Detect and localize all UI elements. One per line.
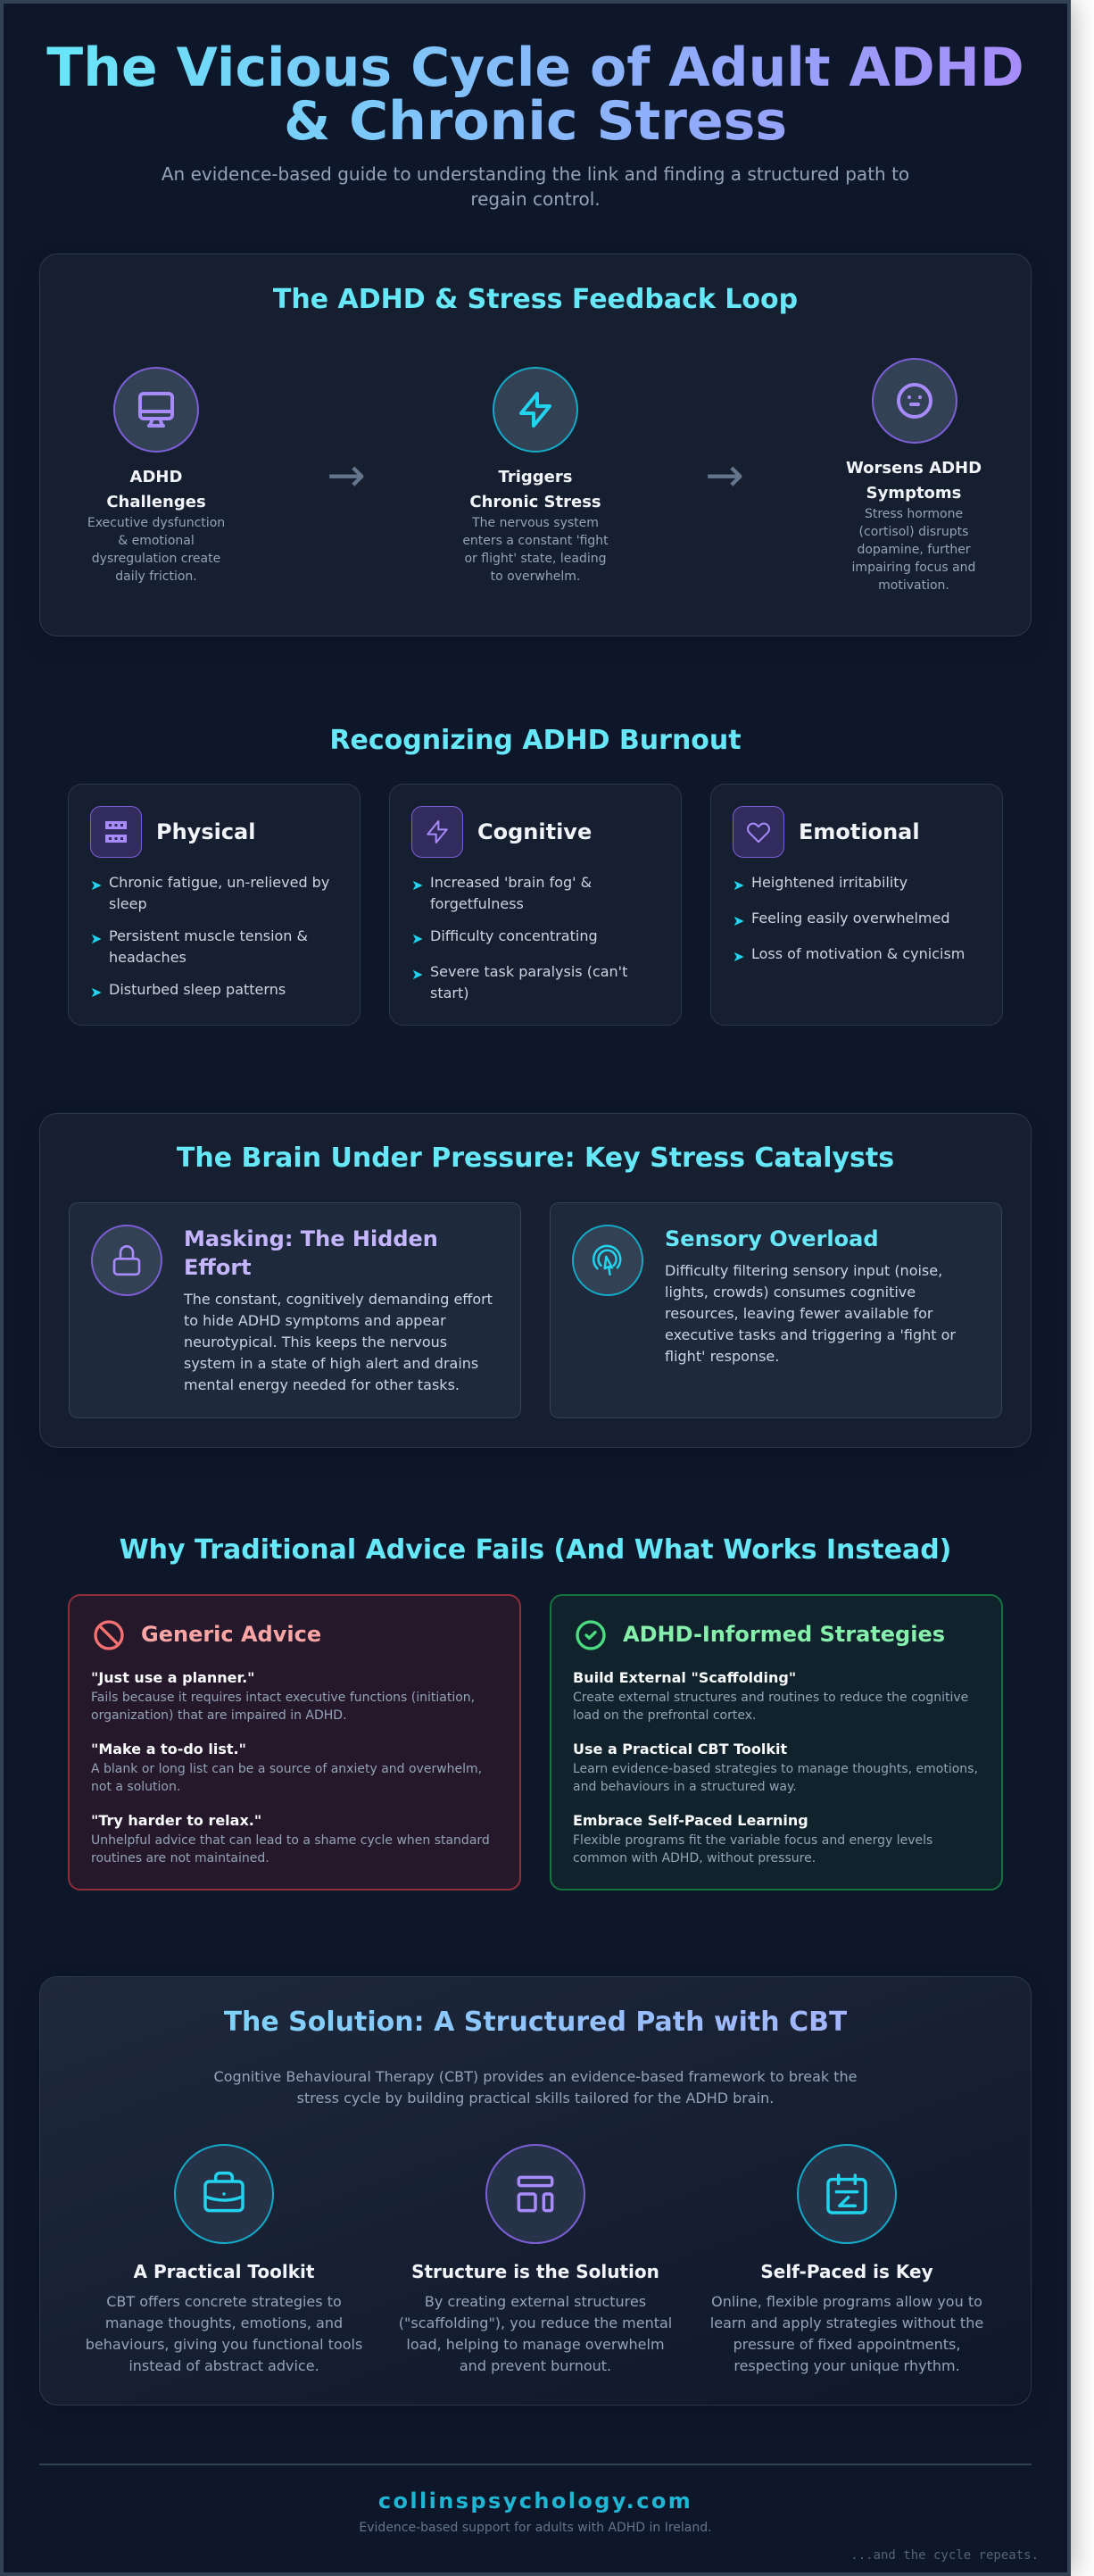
card: physical: sleep <box>109 895 147 912</box>
step title <box>106 468 206 511</box>
step title: Symptoms <box>866 484 961 503</box>
strategy item: Create external structures and routines to reduce the cognitive <box>573 1691 968 1705</box>
list item: ➤ <box>733 877 744 893</box>
card description: mental energy needed for other tasks. <box>184 1376 460 1393</box>
card: ADHD-informed strategies <box>550 1594 1003 1890</box>
list item: Increased 'brain fog' & <box>430 874 592 891</box>
strategy item: Embrace Self-Paced Learning <box>573 1812 808 1829</box>
icon: neutral face <box>872 358 957 444</box>
icon: heart <box>733 806 784 858</box>
list item: ➤ <box>90 930 102 947</box>
arrow: step 1 to 2: → <box>327 449 366 503</box>
advice item: "Make a to-do list." <box>91 1741 246 1757</box>
heading: burnout: Recognizing ADHD Burnout <box>329 725 742 756</box>
list item: ➤ <box>733 912 744 929</box>
card: physical: headaches <box>109 949 186 966</box>
column description: respecting your unique rhythm. <box>733 2357 960 2374</box>
title <box>39 41 1032 148</box>
strategy item: Learn evidence-based strategies to manage thoughts, emotions, <box>573 1762 978 1776</box>
step description: (cortisol) disrupts <box>859 525 968 539</box>
list item: Disturbed sleep patterns <box>109 981 286 998</box>
column description: By creating external structures <box>425 2293 646 2310</box>
step title <box>469 468 601 511</box>
column: self-paced <box>710 2144 983 2374</box>
advice item: Unhelpful advice that can lead to a shame cycle when standard <box>91 1833 490 1848</box>
list item: ➤ <box>411 877 423 893</box>
step description: Stress hormone <box>865 507 963 521</box>
card description: executive tasks and triggering a 'fight or <box>665 1326 956 1343</box>
subtitle: regain control. <box>470 188 601 210</box>
step description <box>87 516 225 584</box>
strategy item: Build External "Scaffolding" <box>573 1669 796 1686</box>
icon: calendar <box>797 2144 897 2244</box>
panel: feedback loop <box>39 253 1032 636</box>
step title: Challenges <box>106 493 206 511</box>
column description <box>86 2293 362 2374</box>
card title <box>184 1226 438 1280</box>
step title: ADHD <box>130 468 182 486</box>
card: cognitive <box>389 784 682 1026</box>
card description: Difficulty filtering sensory input (noise, <box>665 1262 942 1279</box>
list item: Heightened irritability <box>751 874 908 891</box>
column description: Online, flexible programs allow you to <box>711 2293 982 2310</box>
step description: daily friction. <box>115 569 197 584</box>
strategy item: Use a Practical CBT Toolkit <box>573 1741 787 1757</box>
heading: advice: Why Traditional Advice Fails (And What Works Instead) <box>120 1534 951 1566</box>
column description: behaviours, giving you functional tools <box>86 2336 362 2353</box>
heading: feedback loop: The ADHD & Stress Feedback Loop <box>273 284 798 315</box>
card description: The constant, cognitively demanding effort <box>184 1291 493 1308</box>
step description: impairing focus and <box>852 561 975 575</box>
list item <box>90 874 329 912</box>
strategy item: load on the prefrontal cortex. <box>573 1708 756 1723</box>
column title: Structure is the Solution <box>411 2261 659 2282</box>
step description: or flight' state, leading <box>464 552 607 566</box>
advice item: routines are not maintained. <box>91 1851 269 1866</box>
strategy item <box>573 1741 978 1794</box>
card: cognitive: forgetfulness <box>430 895 524 912</box>
intro text <box>214 2068 857 2107</box>
intro text: Cognitive Behavioural Therapy (CBT) provides an evidence-based framework to break the <box>214 2068 857 2085</box>
heading: catalysts: The Brain Under Pressure: Key Stress Catalysts <box>177 1143 894 1174</box>
column title: Self-Paced is Key <box>760 2261 933 2282</box>
step title <box>846 459 982 503</box>
card title: Effort <box>184 1255 252 1280</box>
advice item: "Try harder to relax." <box>91 1812 261 1829</box>
card description: to hide ADHD symptoms and appear <box>184 1312 446 1329</box>
strategy item: Flexible programs fit the variable focus and energy levels <box>573 1833 932 1848</box>
section: why traditional advice fails <box>68 1534 1003 1890</box>
column description: and prevent burnout. <box>460 2357 611 2374</box>
step description <box>462 516 609 584</box>
icon: ban <box>94 1620 124 1650</box>
heading: solution: The Solution: A Structured Path with CBT <box>224 2007 847 2038</box>
strategy item: common with ADHD, without pressure. <box>573 1851 816 1866</box>
section: recognizing burnout <box>68 725 1003 1026</box>
step description: & emotional <box>118 534 195 548</box>
card title: Generic Advice <box>141 1622 321 1647</box>
card: emotional <box>710 784 1003 1026</box>
list item <box>411 874 592 912</box>
step title: Chronic Stress <box>469 493 601 511</box>
icon: lightning bolt <box>411 806 463 858</box>
list item: ➤ <box>411 966 423 983</box>
list item: ➤ <box>90 984 102 1001</box>
card description: lights, crowds) consumes cognitive <box>665 1284 916 1300</box>
column: practical toolkit <box>86 2144 362 2374</box>
advice item: A blank or long list can be a source of anxiety and overwhelm, <box>91 1762 482 1776</box>
step description: dopamine, further <box>857 543 971 557</box>
panel: stress catalysts <box>39 1113 1032 1448</box>
column description: load, helping to manage overwhelm <box>406 2336 665 2353</box>
subtitle <box>162 163 909 210</box>
step description: to overwhelm. <box>491 569 580 584</box>
step: triggers chronic stress <box>462 367 609 584</box>
title: & Chronic Stress <box>284 90 787 153</box>
card: masking <box>69 1202 521 1418</box>
cycle note: ...and the cycle repeats. <box>850 2548 1039 2563</box>
card title: Masking: The Hidden <box>184 1226 438 1251</box>
list item <box>90 927 308 966</box>
column description: CBT offers concrete strategies to <box>106 2293 342 2310</box>
column title: A Practical Toolkit <box>134 2261 314 2282</box>
icon: desktop computer <box>113 367 199 453</box>
card description: flight' response. <box>665 1348 779 1365</box>
advice item: organization) that are impaired in ADHD. <box>91 1708 347 1723</box>
column description <box>710 2293 983 2374</box>
card: sensory overload <box>550 1202 1002 1418</box>
icon: sensory pointer <box>572 1225 643 1296</box>
subtitle: An evidence-based guide to understanding the link and finding a structured path to <box>162 163 909 185</box>
list item: ➤ <box>411 930 423 947</box>
column description: learn and apply strategies without the <box>710 2314 983 2331</box>
card title: ADHD-Informed Strategies <box>623 1622 945 1647</box>
step description: dysregulation create <box>92 552 220 566</box>
panel: the solution <box>39 1976 1032 2406</box>
column description: pressure of fixed appointments, <box>733 2336 960 2353</box>
card title: Sensory Overload <box>665 1226 879 1251</box>
column: structure <box>399 2144 672 2374</box>
icon: server <box>90 806 142 858</box>
step description: enters a constant 'fight <box>462 534 609 548</box>
list item: ➤ <box>733 948 744 965</box>
list item: Chronic fatigue, un-relieved by <box>109 874 329 891</box>
icon: template layout <box>485 2144 585 2244</box>
list item: Severe task paralysis (can't <box>430 963 627 980</box>
icon: lightning bolt <box>493 367 578 453</box>
card: generic advice <box>68 1594 521 1890</box>
card description <box>184 1291 493 1393</box>
step description: The nervous system <box>472 516 599 530</box>
advice item <box>91 1812 490 1866</box>
advice item <box>91 1741 482 1794</box>
list item: ➤ <box>90 877 102 893</box>
card: cognitive: start) <box>430 985 469 1001</box>
column description: ("scaffolding"), you reduce the mental <box>399 2314 672 2331</box>
advice item: not a solution. <box>91 1780 180 1794</box>
card description: system in a state of high alert and drains <box>184 1355 478 1372</box>
title: The Vicious Cycle of Adult ADHD <box>46 37 1024 99</box>
card description: neurotypical. This keeps the nervous <box>184 1334 447 1350</box>
advice item: "Just use a planner." <box>91 1669 255 1686</box>
list item: Persistent muscle tension & <box>109 927 308 944</box>
step description: Executive dysfunction <box>87 516 225 530</box>
website link: collinspsychology.com <box>378 2489 692 2514</box>
list item <box>411 963 627 1001</box>
step title: Worsens ADHD <box>846 459 982 478</box>
column description: instead of abstract advice. <box>128 2357 319 2374</box>
strategy item <box>573 1812 932 1866</box>
list item: Feeling easily overwhelmed <box>751 910 949 927</box>
card title: Emotional <box>799 819 920 844</box>
card description: resources, leaving fewer available for <box>665 1305 932 1322</box>
advice item <box>91 1669 475 1723</box>
column description <box>399 2293 672 2374</box>
card title: Physical <box>156 819 255 844</box>
advice item: Fails because it requires intact executive functions (initiation, <box>91 1691 475 1705</box>
list item: Loss of motivation & cynicism <box>751 945 965 962</box>
list item: Difficulty concentrating <box>430 927 598 944</box>
step description <box>852 507 975 593</box>
icon: briefcase <box>174 2144 274 2244</box>
icon: lock <box>91 1225 162 1296</box>
intro text: stress cycle by building practical skills tailored for the ADHD brain. <box>297 2090 774 2107</box>
step: ADHD challenges <box>87 367 225 584</box>
icon: check circle <box>576 1620 606 1650</box>
step title: Triggers <box>499 468 572 486</box>
strategy item <box>573 1669 968 1723</box>
step description: motivation. <box>878 578 949 593</box>
arrow: step 2 to 3: → <box>705 449 744 503</box>
step: worsens ADHD symptoms <box>846 358 982 593</box>
tagline: Evidence-based support for adults with ADHD in Ireland. <box>359 2521 712 2535</box>
strategy item: and behaviours in a structured way. <box>573 1780 797 1794</box>
card title: Cognitive <box>477 819 592 844</box>
footer <box>39 2464 1032 2569</box>
card description <box>665 1262 956 1365</box>
column description: manage thoughts, emotions, and <box>105 2314 343 2331</box>
card: physical <box>68 784 361 1026</box>
